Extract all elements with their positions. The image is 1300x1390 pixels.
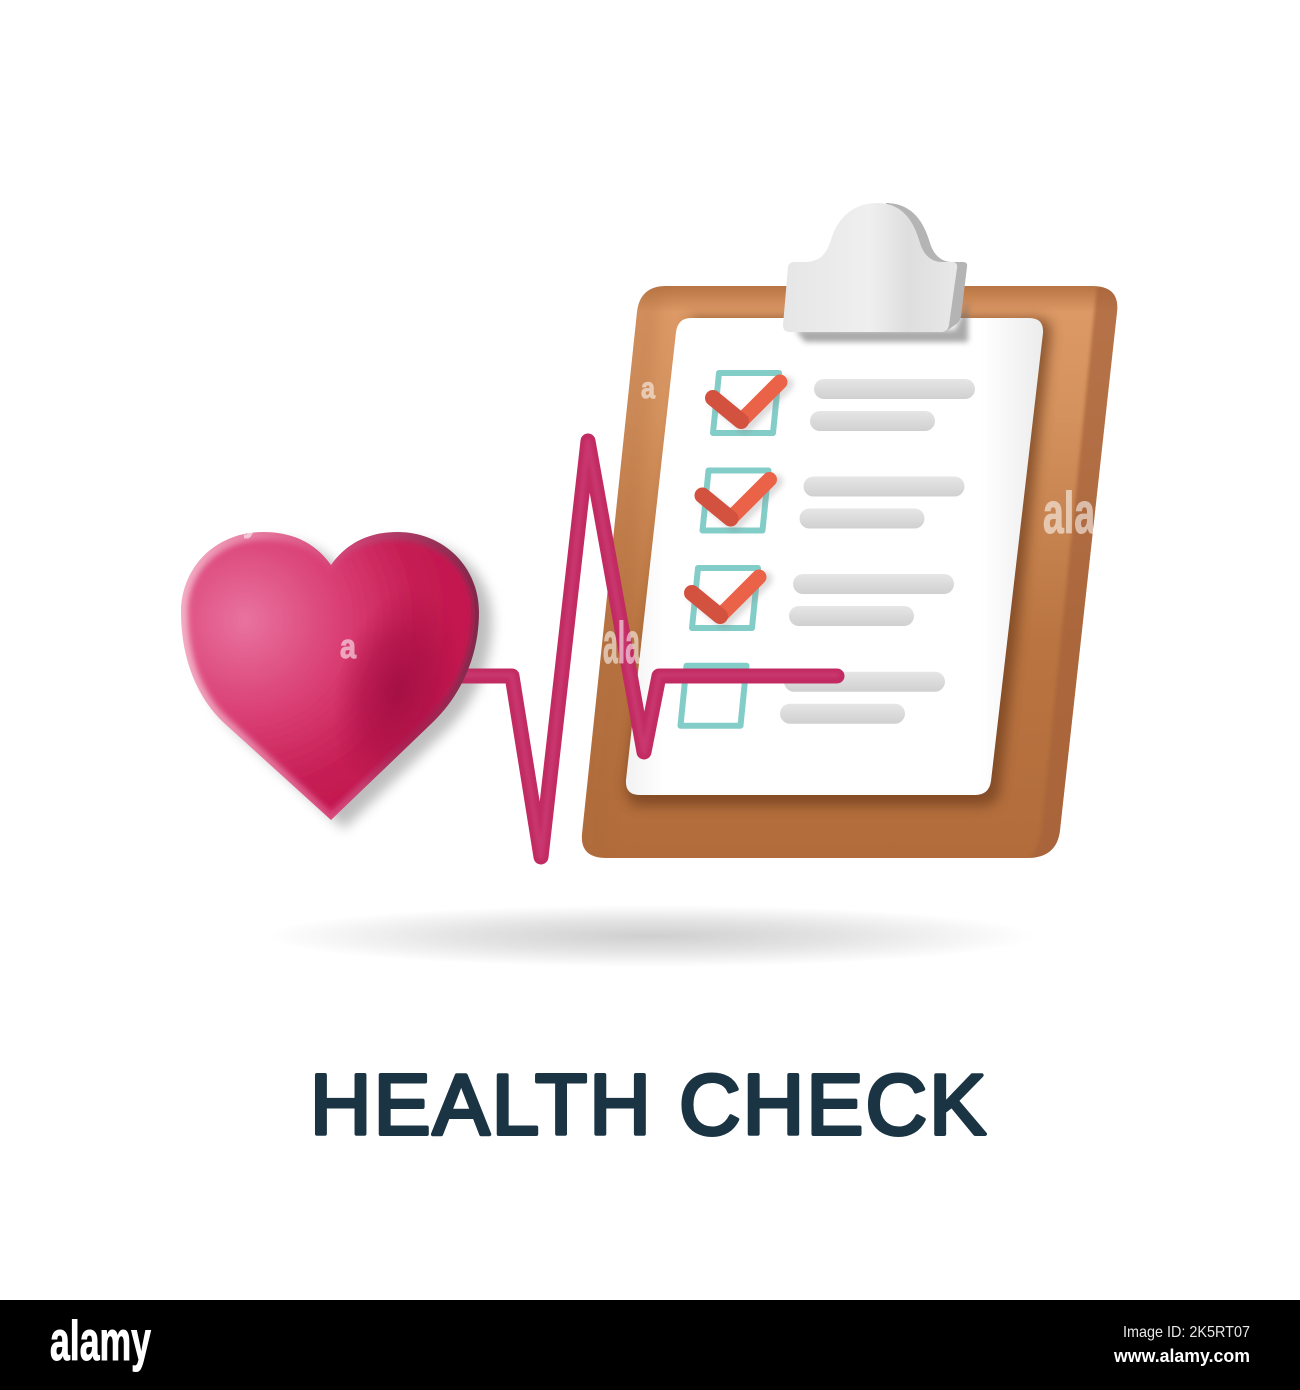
clipboard board xyxy=(570,286,1125,862)
title: HEALTH CHECK xyxy=(310,1058,986,1153)
heart shadow xyxy=(194,541,492,829)
website: www.alamy.com xyxy=(1113,1346,1250,1366)
paper sheet xyxy=(626,318,1043,795)
checklist row 2 xyxy=(702,470,964,530)
watermark fragments xyxy=(243,372,1095,676)
watermark fragments: a xyxy=(641,372,655,405)
checklist row 4 (unchecked) xyxy=(680,666,945,726)
heart xyxy=(181,532,484,820)
footer bar xyxy=(0,1300,1300,1390)
checklist row 1 xyxy=(713,373,975,433)
checklist row 3 xyxy=(692,568,954,628)
watermark fragments: ala xyxy=(603,611,640,676)
watermark fragments: y xyxy=(243,506,258,539)
clipboard xyxy=(570,203,1125,862)
watermark fragments: ala xyxy=(1043,481,1095,546)
ECG pulse line xyxy=(455,441,837,857)
metal clip xyxy=(783,203,968,342)
ground shadow xyxy=(265,905,1035,967)
watermark fragments: a xyxy=(340,628,357,666)
alamy logo: alamy xyxy=(50,1309,151,1372)
image id: Image ID: 2K5RT07 xyxy=(1123,1324,1250,1341)
